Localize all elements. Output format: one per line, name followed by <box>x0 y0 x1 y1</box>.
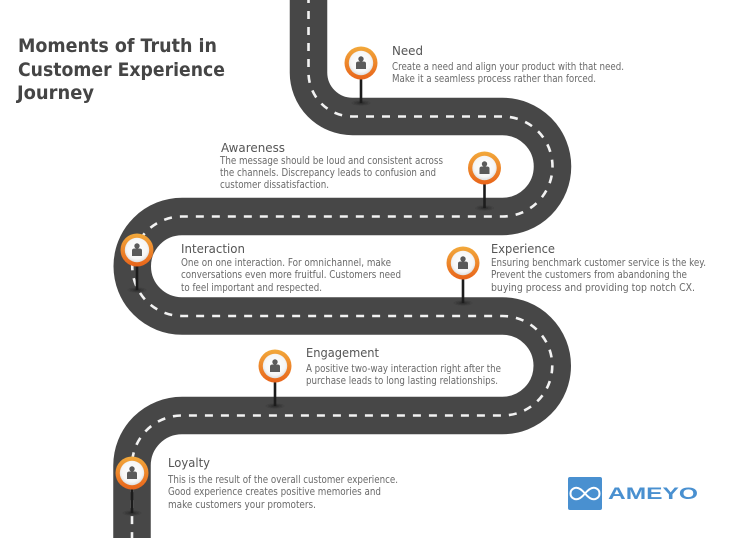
title: Customer Experience <box>18 59 225 81</box>
text: awareness: customer dissatisfaction. <box>220 179 329 191</box>
text: experience: Experience <box>491 241 555 256</box>
text: need: Need <box>392 43 423 58</box>
title: Journey <box>15 82 95 104</box>
text: awareness: The message should be loud and consistent across <box>219 155 443 167</box>
text: interaction <box>181 241 401 294</box>
pin: need <box>344 46 378 106</box>
text: experience <box>491 241 706 294</box>
title <box>15 35 225 104</box>
logo: Ameyo: AMEYO <box>608 485 698 503</box>
pin: interaction <box>120 234 154 293</box>
text: experience: Prevent the customers from abandoning the <box>491 269 687 281</box>
text: engagement: purchase leads to long lasting relationships. <box>306 375 498 387</box>
title: Moments of Truth in <box>18 35 217 57</box>
text: need: Create a need and align your product with that need. <box>392 61 624 73</box>
text: loyalty: make customers your promoters. <box>168 499 316 511</box>
road <box>132 0 552 538</box>
text: experience: buying process and providing top notch CX. <box>491 282 695 294</box>
pin: engagement <box>258 350 292 409</box>
text: engagement <box>306 345 501 387</box>
text: interaction: One on one interaction. For omnichannel, make <box>181 257 391 269</box>
text: need <box>392 43 624 85</box>
pin: loyalty <box>116 456 148 516</box>
text: interaction: Interaction <box>181 241 245 256</box>
text: engagement: A positive two-way interaction right after the <box>306 363 501 375</box>
text: loyalty <box>167 455 398 511</box>
text: interaction: to feel important and respected. <box>181 282 322 294</box>
text: loyalty: This is the result of the overall customer experience. <box>167 474 398 486</box>
text: loyalty: Loyalty <box>168 455 211 470</box>
text: loyalty: Good experience creates positive memories and <box>168 486 381 498</box>
text: awareness: the channels. Discrepancy leads to confusion and <box>220 167 436 179</box>
text: engagement: Engagement <box>306 345 379 360</box>
text: interaction: conversations even more fruitful. Customers need <box>181 269 401 281</box>
logo: Ameyo <box>568 477 698 510</box>
pin: experience <box>446 246 480 306</box>
pin: awareness <box>468 152 501 211</box>
text: need: Make it a seamless process rather than forced. <box>392 73 596 85</box>
text: awareness: Awareness <box>221 140 285 155</box>
text: awareness <box>219 140 443 191</box>
